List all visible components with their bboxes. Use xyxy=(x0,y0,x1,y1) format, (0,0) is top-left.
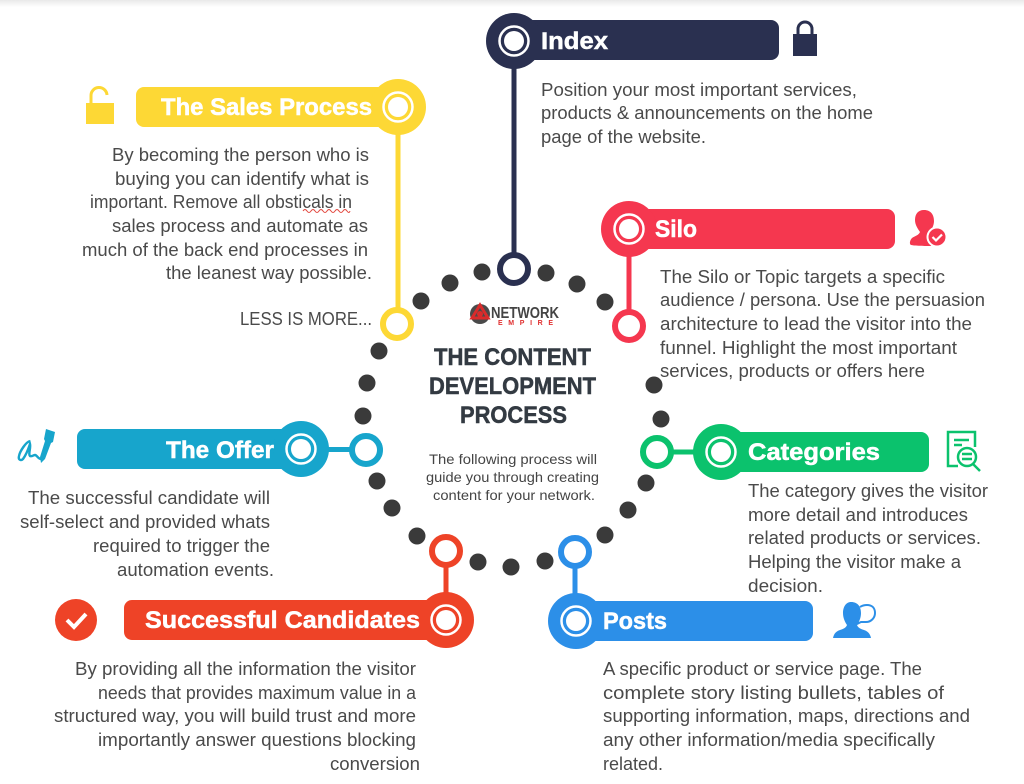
sales text: sales process and automate as xyxy=(112,216,368,236)
categories text: The category gives the visitor xyxy=(748,481,988,501)
offer text: automation events. xyxy=(117,560,274,580)
panel: silo xyxy=(601,201,985,381)
candidates connector and node xyxy=(432,537,460,620)
panel: index xyxy=(486,13,873,283)
silo connector and node xyxy=(615,229,643,340)
silo header: Silo xyxy=(655,216,697,243)
sales text: the leanest way possible. xyxy=(166,263,372,283)
sales text: important. Remove all obsticals in xyxy=(90,192,352,212)
categories header xyxy=(693,424,929,480)
candidates text: needs that provides maximum value in a xyxy=(98,683,417,703)
candidates text: conversion xyxy=(330,754,420,774)
candidates text: structured way, you will build trust and more xyxy=(54,706,416,726)
index header: Index xyxy=(541,28,609,55)
offer header xyxy=(77,421,329,477)
logo: network empire: NETWORK xyxy=(491,305,559,322)
silo header xyxy=(601,201,895,257)
index text xyxy=(541,80,873,147)
silo text: architecture to lead the visitor into the xyxy=(660,314,972,334)
title: PROCESS xyxy=(460,402,567,429)
dotted ring xyxy=(354,264,670,576)
offer text: The successful candidate will xyxy=(28,488,270,508)
logo: network empire: EMPIRE xyxy=(498,320,553,327)
candidates text xyxy=(54,659,420,774)
candidates text: importantly answer questions blocking xyxy=(98,730,416,750)
categories text: decision. xyxy=(748,576,823,596)
index text: Position your most important services, xyxy=(541,80,857,100)
panel: posts xyxy=(548,538,970,774)
silo text: funnel. Highlight the most important xyxy=(660,338,957,358)
panel: categories xyxy=(643,424,988,596)
title: THE CONTENT xyxy=(434,344,591,371)
center description xyxy=(426,451,599,503)
candidates header: Successful Candidates xyxy=(145,607,420,634)
index text: products & announcements on the home xyxy=(541,103,873,123)
index connector and node xyxy=(500,41,528,283)
posts connector and node xyxy=(561,538,589,621)
categories text: more detail and introduces xyxy=(748,505,968,525)
silo text: The Silo or Topic targets a specific xyxy=(660,267,945,287)
candidates header xyxy=(124,592,474,648)
posts text: supporting information, maps, directions and xyxy=(603,706,970,726)
posts text: any other information/media specifically xyxy=(603,730,935,750)
title xyxy=(429,344,596,429)
posts text: A specific product or service page. The xyxy=(603,659,922,679)
silo text xyxy=(660,267,985,381)
panel: the offer xyxy=(19,421,380,580)
posts header: Posts xyxy=(603,608,667,635)
categories text: related products or services. xyxy=(748,528,981,548)
offer text xyxy=(20,488,274,580)
icon: navy lock xyxy=(793,22,817,56)
sales text: much of the back end processes in xyxy=(82,240,368,260)
icon: pen and signature xyxy=(19,429,55,463)
center description: The following process will xyxy=(429,451,597,467)
sales text: LESS IS MORE... xyxy=(240,309,372,329)
sales text: By becoming the person who is xyxy=(112,145,369,165)
silo text: services, products or offers here xyxy=(660,361,925,381)
logo: network empire xyxy=(470,304,559,327)
sales text xyxy=(82,145,372,329)
sales text: buying you can identify what is xyxy=(115,169,369,189)
icon: person with check xyxy=(910,210,946,246)
center description: content for your network. xyxy=(433,487,595,503)
categories header: Categories xyxy=(748,439,880,466)
candidates text: By providing all the information the visitor xyxy=(75,659,416,679)
categories connector and node xyxy=(643,438,722,466)
index text: page of the website. xyxy=(541,127,706,147)
icon: yellow open lock xyxy=(86,87,114,124)
silo text: audience / persona. Use the persuasion xyxy=(660,290,985,310)
offer text: required to trigger the xyxy=(93,536,270,556)
icon: document with magnifier xyxy=(948,432,980,471)
offer connector and node xyxy=(301,436,380,464)
posts text: complete story listing bullets, tables of xyxy=(603,683,945,703)
offer text: self-select and provided whats xyxy=(20,512,270,532)
panel: the sales process xyxy=(82,79,426,338)
sales header xyxy=(136,79,426,135)
categories text: Helping the visitor make a xyxy=(748,552,962,572)
panel: successful candidates xyxy=(54,537,474,774)
categories text xyxy=(748,481,988,596)
icon: person with speech bubble xyxy=(833,602,875,638)
icon: check circle xyxy=(55,599,97,641)
posts text: related. xyxy=(603,754,663,774)
center description: guide you through creating xyxy=(426,469,599,485)
sales connector and node xyxy=(383,107,411,338)
sales header: The Sales Process xyxy=(161,94,372,121)
posts text xyxy=(603,659,970,774)
title: DEVELOPMENT xyxy=(429,373,596,400)
posts header xyxy=(548,593,813,649)
index header xyxy=(486,13,779,69)
offer header: The Offer xyxy=(166,437,274,464)
